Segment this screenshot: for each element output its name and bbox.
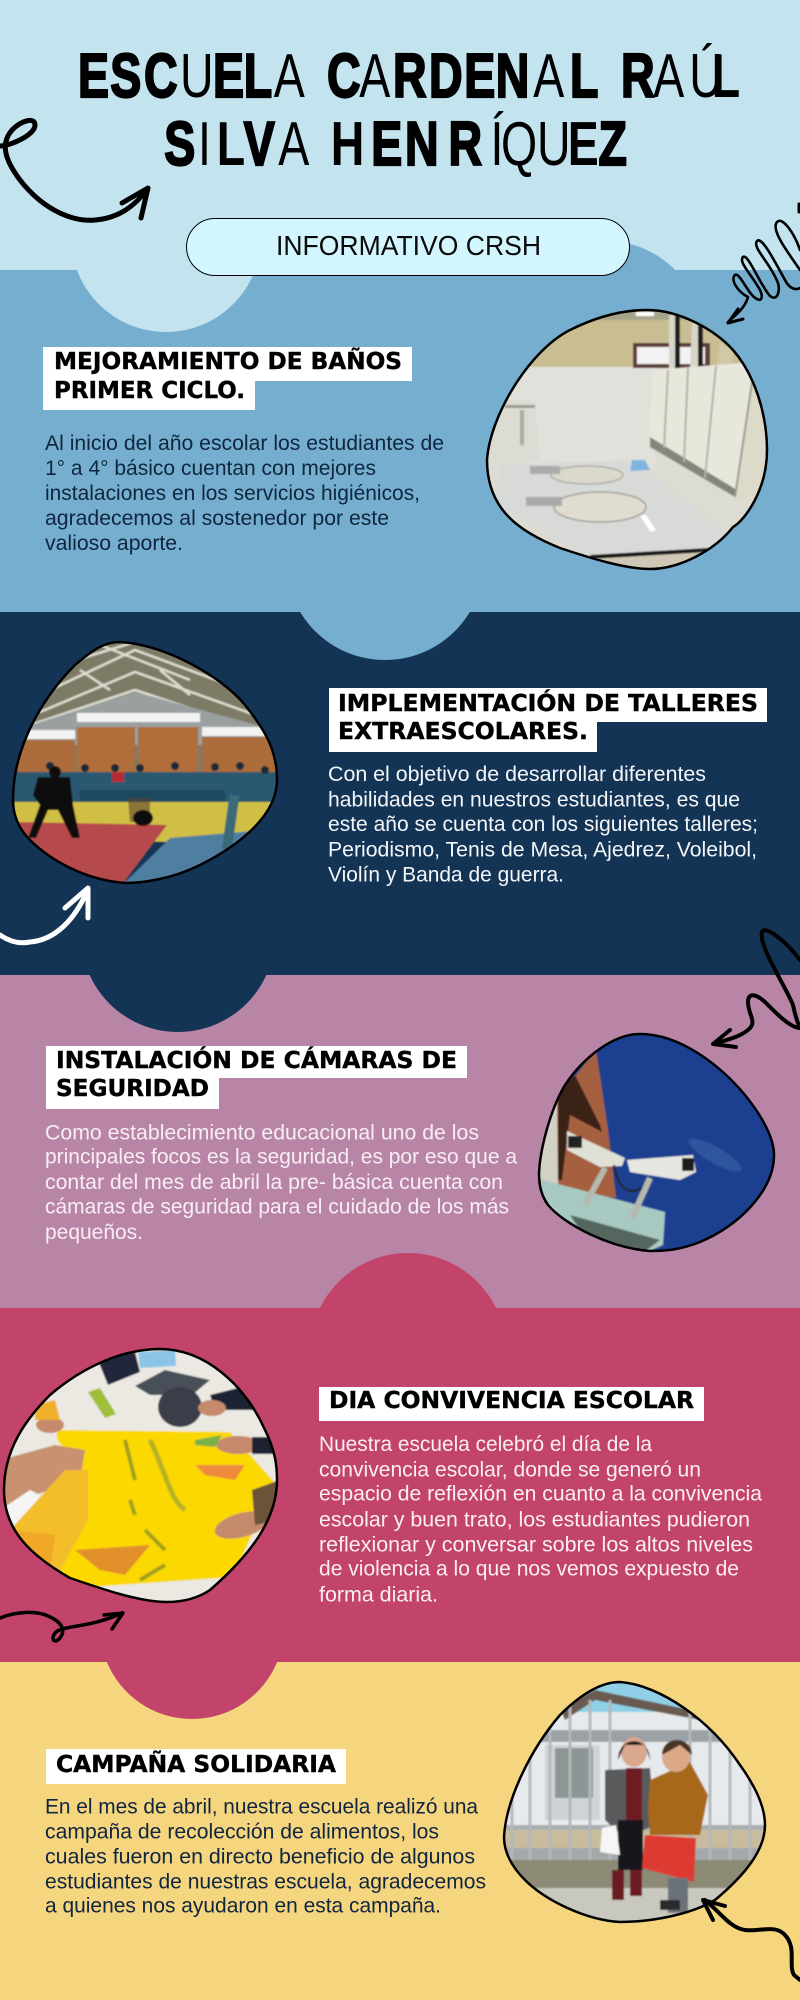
title: E: [464, 40, 495, 111]
pill: informativo: [186, 218, 630, 276]
title: Í: [491, 108, 504, 179]
text: cámaras body: cámaras de seguridad para el cuidado de los más: [45, 1196, 509, 1218]
arrow: black loop: [0, 1612, 123, 1641]
title: Ú: [689, 40, 723, 111]
heading: talleres: EXTRAESCOLARES.: [338, 719, 588, 745]
photo: bathroom: [480, 305, 775, 575]
text: baños body: [45, 432, 444, 555]
title: U: [180, 40, 214, 111]
panel: convivencia background: [0, 1253, 800, 1662]
text: campaña body: En el mes de abril, nuestra escuela realizó una: [45, 1796, 478, 1818]
text: baños body: 1° a 4° básico cuentan con mejores: [45, 457, 376, 480]
text: convivencia body: convivencia escolar, donde se generó un: [319, 1458, 701, 1482]
title: R: [448, 108, 482, 179]
photo: security cameras: [535, 1030, 780, 1255]
text: campaña body: cuales fueron en directo beneficio de algunos: [45, 1846, 475, 1868]
heading: cámaras: SEGURIDAD: [56, 1076, 209, 1102]
photo: gymnasium: [10, 640, 280, 885]
text: talleres body: Con el objetivo de desarrollar diferentes: [328, 763, 706, 786]
title: A: [278, 108, 310, 179]
title: E: [371, 108, 402, 179]
title: A: [359, 40, 391, 111]
title: C: [327, 40, 361, 111]
text: campaña body: a quienes nos ayudaron en esta campaña.: [45, 1894, 441, 1918]
text: baños body: Al inicio del año escolar los estudiantes de: [45, 432, 444, 455]
title: R: [621, 40, 655, 111]
text: talleres body: [328, 763, 758, 886]
arrow: coil top right: [728, 204, 800, 323]
title: H: [331, 108, 364, 179]
title: L: [570, 40, 598, 111]
text: cámaras body: pequeños.: [45, 1221, 143, 1244]
heading: cámaras: [46, 1046, 467, 1109]
text: campaña body: [45, 1796, 486, 1918]
title: R: [393, 40, 427, 111]
title: E: [213, 40, 244, 111]
title: V: [244, 108, 275, 179]
text: talleres body: Violín y Banda de guerra.: [328, 864, 564, 886]
panel: baños background: [0, 142, 800, 612]
text: convivencia body: reflexionar y conversar sobre los altos niveles: [319, 1534, 753, 1556]
text: cámaras body: principales focos es la seguridad, es por eso que a: [45, 1146, 517, 1168]
text: talleres body: habilidades en nuestros estudiantes, es que: [328, 788, 740, 812]
title: S: [164, 108, 195, 179]
title: A: [533, 40, 565, 111]
arrow: black squiggle: [713, 930, 800, 1047]
title: I: [198, 108, 211, 179]
arrow: bottom right: [703, 1900, 800, 1980]
title: [78, 40, 740, 179]
text: convivencia body: de violencia a lo que nos vemos expuesto de: [319, 1558, 739, 1580]
title: E: [568, 108, 599, 179]
title: N: [496, 40, 529, 111]
panel: cámaras background: [0, 838, 800, 1308]
photo: poster activity: [0, 1345, 282, 1605]
pill: informativo: INFORMATIVO CRSH: [276, 230, 541, 261]
title: D: [429, 40, 463, 111]
text: talleres body: Periodismo, Tenis de Mesa, Ajedrez, Voleibol,: [328, 838, 757, 862]
title: Q: [501, 108, 537, 179]
text: baños body: valioso aporte.: [45, 532, 183, 555]
text: convivencia body: espacio de reflexión en cuanto a la convivencia: [319, 1482, 762, 1506]
text: convivencia body: Nuestra escuela celebró el día de la: [319, 1433, 652, 1456]
heading: talleres: [329, 688, 767, 752]
text: campaña body: campaña de recolección de alimentos, los: [45, 1820, 439, 1844]
text: convivencia body: forma diaria.: [319, 1584, 438, 1606]
heading: campaña solidaria: [46, 1749, 346, 1784]
title: L: [244, 40, 272, 111]
title: A: [653, 40, 685, 111]
title: S: [110, 40, 141, 111]
heading: cámaras: INSTALACIÓN DE CÁMARAS DE: [56, 1046, 457, 1074]
title: L: [217, 108, 245, 179]
heading: campaña solidaria: CAMPAÑA SOLIDARIA: [56, 1750, 336, 1778]
panel: talleres background: [0, 462, 800, 975]
title: A: [274, 40, 305, 111]
title: N: [405, 108, 439, 179]
title: Z: [598, 108, 627, 179]
text: convivencia body: escolar y buen trato, los estudiantes pudieron: [319, 1508, 750, 1532]
text: baños body: agradecemos al sostenedor por este: [45, 507, 389, 530]
text: talleres body: este año se cuenta con los siguientes talleres;: [328, 813, 758, 836]
header background: [0, 0, 800, 270]
title: L: [712, 40, 740, 111]
text: campaña body: estudiantes de nuestras escuela, agradecemos: [45, 1870, 486, 1894]
text: cámaras body: Como establecimiento educacional uno de los: [45, 1122, 479, 1144]
panel: campaña background: [0, 1535, 800, 2000]
title: U: [537, 108, 571, 179]
text: cámaras body: contar del mes de abril la pre- básica cuenta con: [45, 1171, 503, 1194]
heading: talleres: IMPLEMENTACIÓN DE TALLERES: [338, 689, 758, 717]
heading: mejoramiento de baños: MEJORAMIENTO DE BAÑOS: [54, 347, 402, 375]
text: cámaras body: [45, 1122, 517, 1244]
title: C: [144, 40, 178, 111]
heading: mejoramiento de baños: PRIMER CICLO.: [54, 378, 245, 404]
text: convivencia body: [319, 1433, 762, 1606]
title: E: [78, 40, 109, 111]
arrow: top left swirl: [0, 120, 148, 220]
heading: dia convivencia: DIA CONVIVENCIA ESCOLAR: [329, 1388, 694, 1414]
text: baños body: instalaciones en los servicios higiénicos,: [45, 482, 420, 505]
photo: two women at fence: [500, 1680, 770, 1928]
arrow: white curve: [0, 888, 88, 943]
heading: mejoramiento de baños: [43, 347, 412, 410]
